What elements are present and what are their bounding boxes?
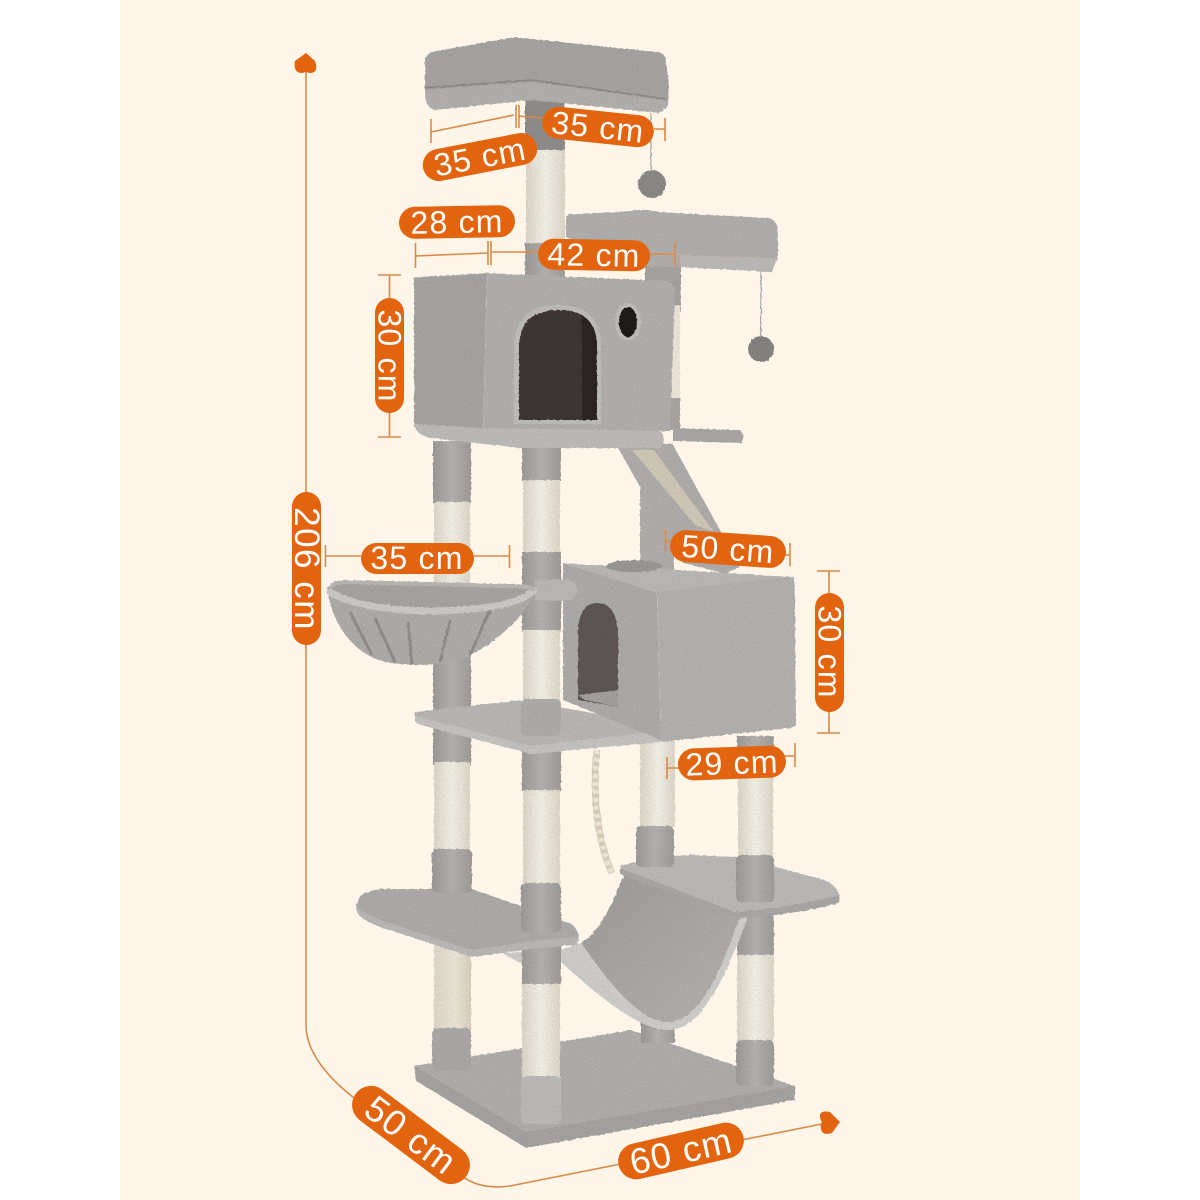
heart arrow top bbox=[295, 53, 316, 73]
dimension: 35 cm basket: 35 cm bbox=[370, 540, 464, 576]
back right post stub bbox=[641, 1015, 675, 1043]
lower house bbox=[415, 560, 796, 754]
dimension: 42 cm: 42 cm bbox=[547, 236, 641, 274]
dimension: 30 cm lower house: 30 cm bbox=[812, 605, 848, 699]
hammock bbox=[502, 875, 748, 1030]
front right post upper bbox=[736, 736, 774, 902]
top perch bbox=[425, 37, 669, 113]
upper house door bbox=[514, 305, 601, 424]
upper house shelf bbox=[673, 428, 743, 443]
label: 60 cm width: 60 cm bbox=[626, 1119, 736, 1183]
dimension: top perch depth: 35 cm bbox=[431, 130, 529, 184]
dimension: top perch width bbox=[431, 103, 665, 151]
dimension: 50 cm lower house: 50 cm bbox=[680, 528, 776, 570]
center post upper bbox=[521, 446, 561, 736]
total height line bbox=[306, 66, 354, 1098]
top post bbox=[525, 100, 565, 281]
second tier perch bbox=[566, 210, 778, 272]
dimension: 28 cm bbox=[399, 203, 515, 268]
dimension: top perch width: 35 cm bbox=[550, 104, 646, 150]
left post upper bbox=[432, 441, 472, 893]
back right post bbox=[636, 735, 675, 867]
left post lower bbox=[432, 945, 471, 1071]
dimension: 28 cm: 28 cm bbox=[410, 203, 504, 241]
dimension: 29 cm: 29 cm bbox=[685, 743, 779, 783]
label: 206 cm: 206 cm bbox=[287, 507, 326, 631]
upper right post bbox=[645, 262, 681, 430]
label: 50 cm depth bbox=[344, 1077, 478, 1193]
basket perch bbox=[326, 579, 577, 665]
base board bbox=[414, 1030, 795, 1148]
base width line bbox=[462, 1124, 822, 1187]
ramp support post bbox=[640, 470, 674, 570]
rope bbox=[595, 750, 612, 873]
second ball toy bbox=[748, 272, 774, 362]
dimension: 42 cm bbox=[491, 236, 675, 274]
heart arrow right bbox=[820, 1112, 840, 1134]
upper house bbox=[414, 273, 743, 448]
dimension: 30 cm lower house bbox=[812, 571, 848, 733]
cat tree bbox=[326, 37, 840, 1148]
dimension: 35 cm basket bbox=[326, 540, 510, 576]
dimension: 30 cm upper house: 30 cm bbox=[372, 309, 408, 403]
top ball toy bbox=[638, 113, 666, 198]
front right post lower bbox=[736, 905, 774, 1086]
center post middle bbox=[521, 750, 561, 932]
right platform bbox=[620, 855, 840, 918]
background bbox=[120, 0, 1080, 1200]
lower house door bbox=[578, 603, 618, 707]
left platform bbox=[356, 889, 579, 957]
label: 50 cm depth: 50 cm bbox=[357, 1087, 465, 1183]
ramp bbox=[618, 443, 740, 574]
upper house floor bbox=[415, 424, 664, 448]
center post lower bbox=[521, 945, 561, 1124]
dimension: 30 cm upper house bbox=[372, 275, 408, 437]
upper house round hole bbox=[615, 303, 641, 341]
